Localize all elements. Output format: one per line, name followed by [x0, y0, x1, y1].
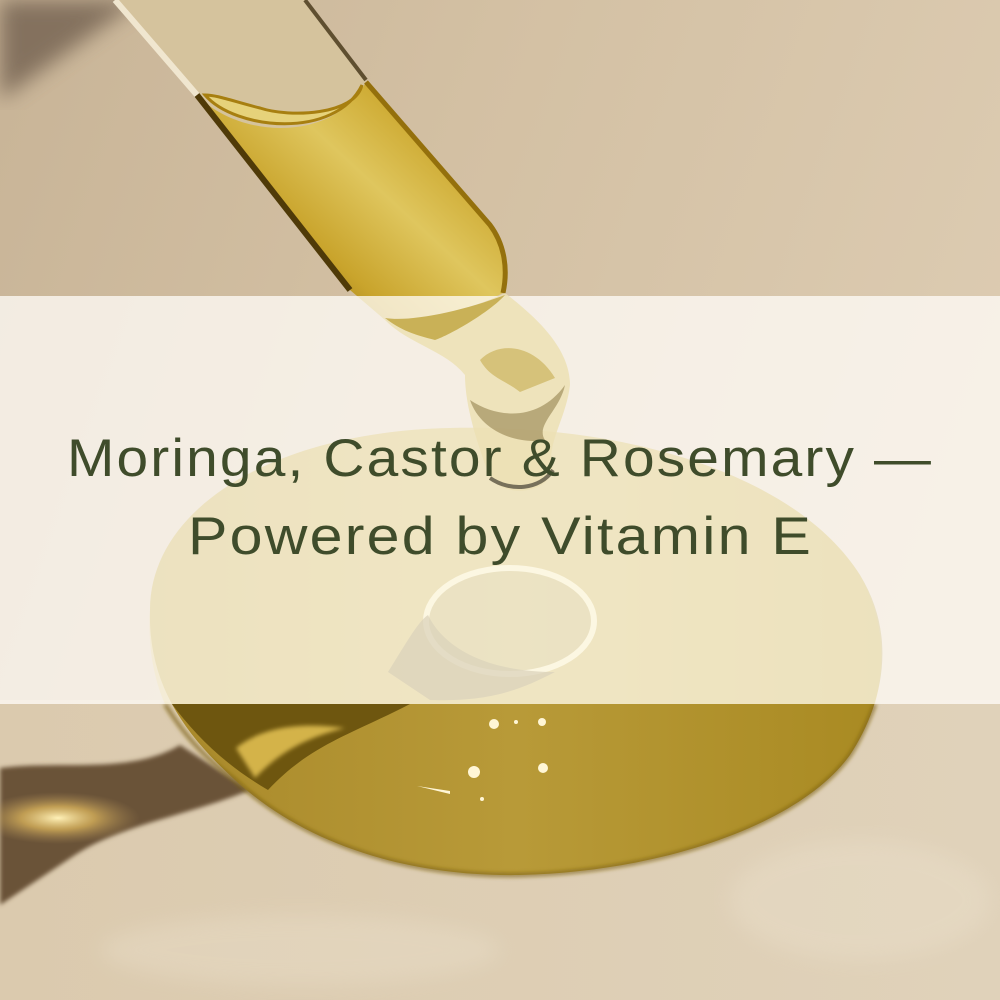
dropper: meniscus	[205, 85, 362, 124]
glass dropper	[115, 0, 505, 320]
central oil droplet	[388, 568, 594, 700]
heading line 2: Powered by Vitamin E	[188, 507, 813, 566]
dropper: clear upper glass	[115, 0, 366, 134]
bottom light patches on stone	[100, 840, 990, 985]
heading	[67, 429, 933, 566]
sparkles on oil	[417, 718, 548, 801]
dropper tip seen through band	[385, 293, 570, 491]
dropper: oil-filled tube	[197, 82, 505, 320]
shadow: dropper cast on the stone	[0, 745, 250, 905]
oil puddle	[150, 428, 882, 875]
shadow: top-left corner	[0, 0, 140, 100]
translucent white band	[0, 296, 1000, 704]
band tint over puddle	[150, 428, 881, 704]
heading line 1: Moringa, Castor & Rosemary —	[67, 429, 933, 488]
